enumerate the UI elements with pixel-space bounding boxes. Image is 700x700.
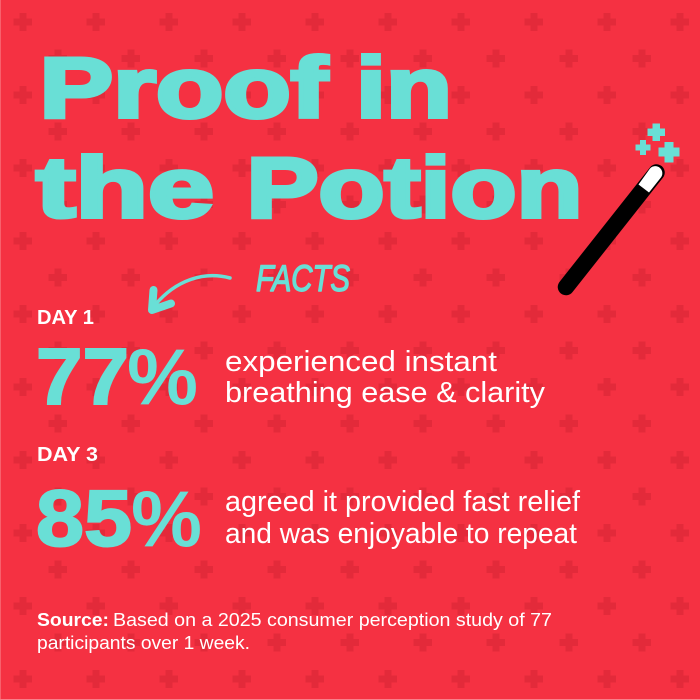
heading: day 3: DAY 3 bbox=[37, 444, 98, 466]
stat: 85% bbox=[36, 474, 202, 564]
icon: sparkles bbox=[636, 124, 680, 162]
title bbox=[36, 41, 582, 236]
icon: magic wand bbox=[566, 124, 680, 287]
title: Proof bbox=[40, 41, 328, 136]
heading: day 1: DAY 1 bbox=[37, 307, 94, 329]
title: the bbox=[36, 141, 214, 236]
text block: day 1 description: breathing ease & clarity bbox=[225, 377, 546, 409]
source note: Source: bbox=[37, 609, 109, 630]
title: in bbox=[356, 41, 452, 136]
text block: day 3 description: agreed it provided fast relief bbox=[225, 486, 580, 518]
source note bbox=[37, 609, 552, 653]
text block: day 3 description bbox=[225, 486, 580, 550]
title: Potion bbox=[246, 141, 582, 236]
arrow bbox=[152, 276, 230, 310]
stat: 77% bbox=[36, 332, 198, 422]
text block: day 1 description: experienced instant bbox=[225, 346, 497, 378]
source note: Based on a 2025 consumer perception study of 77 bbox=[113, 609, 552, 630]
stat: 85%: % bbox=[131, 474, 202, 564]
text block: day 1 description bbox=[225, 346, 546, 409]
stat: 77%: % bbox=[127, 332, 198, 422]
text block: day 3 description: and was enjoyable to repeat bbox=[225, 518, 577, 550]
stat: 85%: 85 bbox=[36, 474, 132, 562]
handwritten label: facts: FACTS bbox=[256, 258, 350, 299]
source note: participants over 1 week. bbox=[37, 632, 250, 653]
stat: 77%: 77 bbox=[36, 332, 129, 421]
